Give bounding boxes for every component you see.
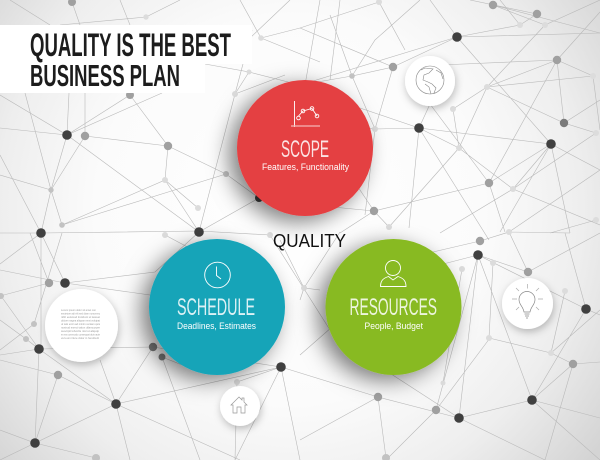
badge: text	[45, 289, 118, 362]
icon: bulb	[512, 284, 543, 318]
panel: scope	[237, 80, 373, 216]
panel: schedule: Deadlines, Estimates	[177, 321, 256, 332]
badge: light bulb	[502, 278, 553, 329]
paragraph: Lorem ipsum dolor sit amet con	[61, 308, 96, 312]
paragraph: ex ea commodo consequat duis aute	[61, 332, 100, 336]
icon: globe	[416, 66, 444, 94]
center label: quality: QUALITY	[273, 231, 346, 251]
panel: scope: SCOPE	[281, 136, 329, 163]
title banner	[0, 25, 252, 93]
panel: resources: RESOURCES	[350, 294, 437, 321]
icon: clock	[205, 262, 230, 288]
paragraph	[61, 308, 100, 340]
paragraph: ut wisi enim ad minim veniam quis	[61, 322, 100, 326]
paragraph: nostrud exerci tation ullamcorper	[61, 326, 100, 330]
panel: schedule	[149, 239, 285, 375]
panel: resources	[326, 239, 462, 375]
icon: person	[380, 260, 406, 286]
badge: globe	[405, 56, 455, 106]
icon: house	[231, 397, 247, 413]
title banner: QUALITY IS THE BEST	[30, 27, 231, 63]
paragraph: suscipit lobortis nisl ut aliquip	[61, 329, 99, 333]
paragraph: dolore magna aliquam erat volutpat	[61, 318, 100, 322]
panel: schedule: SCHEDULE	[177, 294, 255, 321]
icon: line chart	[291, 101, 320, 127]
panel: scope: Features, Functionality	[262, 162, 349, 172]
panel: resources: People, Budget	[364, 321, 423, 332]
title banner: BUSINESS PLAN	[30, 58, 180, 93]
paragraph: vel eum iriure dolor in hendrerit	[61, 336, 99, 340]
badge: home	[220, 386, 260, 426]
paragraph: nibh euismod tincidunt ut laoreet	[61, 315, 100, 319]
paragraph: sectetuer adi elit sed diam nonummy	[61, 312, 100, 316]
